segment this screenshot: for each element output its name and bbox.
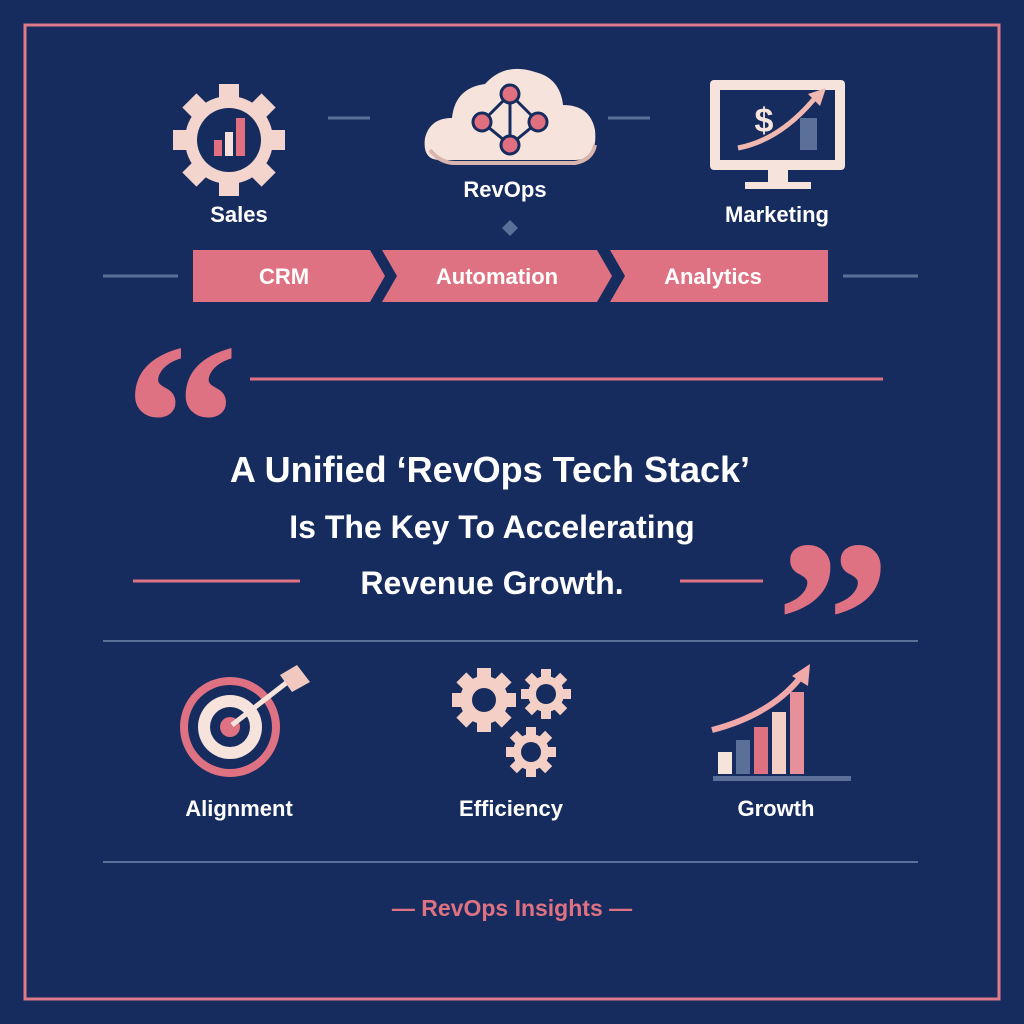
quote text: Is The Key To Accelerating <box>289 509 695 545</box>
label: sales: Sales <box>210 202 268 227</box>
icon: marketing monitor <box>710 80 845 189</box>
label: marketing: Marketing <box>725 202 829 227</box>
labels: benefits: Alignment <box>185 796 293 821</box>
icon: target <box>180 665 310 777</box>
labels: benefits <box>185 796 814 821</box>
quote: closing mark: ” <box>776 493 891 748</box>
chevron band: tech stack: Analytics <box>664 264 762 289</box>
icon: gears <box>452 668 571 777</box>
icon: growth chart <box>712 664 851 781</box>
chevron band: tech stack: Automation <box>436 264 558 289</box>
quote text <box>230 449 750 601</box>
quote text: A Unified ‘RevOps Tech Stack’ <box>230 449 750 490</box>
labels: benefits: Efficiency <box>459 796 564 821</box>
icon: sales gear <box>173 84 285 196</box>
label: revops: RevOps <box>463 177 547 202</box>
quote text: Revenue Growth. <box>360 565 624 601</box>
labels: benefits: Growth <box>738 796 814 821</box>
chevron band: tech stack <box>193 250 828 302</box>
quote: opening mark: “ <box>124 296 239 551</box>
icon: cloud network <box>425 69 595 163</box>
diamond <box>502 220 518 236</box>
chevron band: tech stack: CRM <box>259 264 309 289</box>
footer: — RevOps Insights — <box>392 895 632 921</box>
icon: marketing monitor: $ <box>755 102 774 140</box>
